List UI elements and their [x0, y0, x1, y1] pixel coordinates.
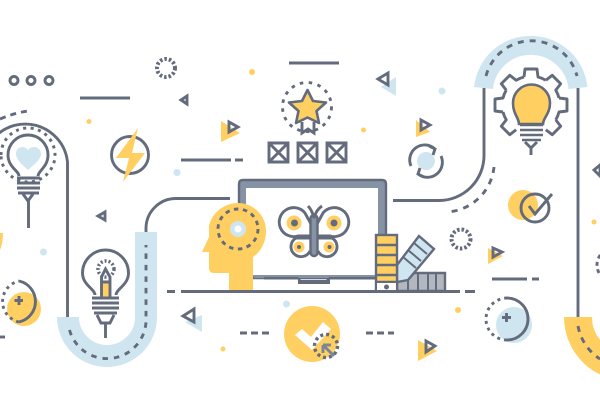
yellow dot: [455, 307, 461, 313]
triangle: [98, 212, 105, 220]
triangle pair yellow: [418, 340, 437, 361]
blue dot: [283, 300, 290, 308]
check with cursor icon: [284, 306, 340, 362]
bulb with heart icon: [1, 128, 55, 228]
head with dashed brain: [202, 203, 266, 290]
edge triangle: [594, 165, 600, 176]
yellow dot: [220, 346, 226, 352]
three crossed boxes: [269, 143, 346, 162]
short line: [80, 97, 130, 99]
left path arch: [0, 111, 68, 317]
edge dashed ring: [597, 248, 600, 282]
dashed line: [492, 278, 539, 280]
butterfly icon: [279, 206, 349, 257]
bulb with pencil icon: [82, 250, 128, 338]
blue dot: [174, 169, 180, 176]
top right blue arch: [484, 41, 578, 88]
dashed line: [366, 332, 394, 334]
yellow edge shape: [0, 233, 3, 250]
dashed line: [181, 159, 243, 161]
triangle pair blue: [183, 309, 202, 332]
short line: [289, 62, 339, 64]
yellow dot: [86, 119, 92, 124]
blue dot: [438, 88, 446, 94]
right connector lines: [393, 88, 578, 317]
laptop: [239, 180, 386, 284]
dashed line: [240, 332, 269, 334]
yellow dot: [592, 220, 596, 224]
sun ring icon: [157, 59, 175, 77]
triangle pair yellow: [488, 248, 503, 264]
gear bulb icon: [495, 69, 567, 155]
swatches: [376, 235, 445, 291]
ground line: [167, 290, 475, 293]
bottom right yellow arc: [578, 317, 600, 367]
three small circles: [10, 76, 53, 84]
plus circle right: [486, 298, 532, 343]
triangle pair yellow: [221, 121, 240, 142]
check circle icon: [508, 190, 552, 222]
blue U track: [68, 232, 146, 359]
lightning bolt icon: [112, 128, 148, 182]
triangle: [181, 96, 187, 104]
plus circle left: [3, 281, 41, 326]
triangle pair yellow: [416, 120, 430, 137]
star badge icon: [282, 82, 332, 133]
yellow dot: [249, 69, 255, 75]
refresh icon: [410, 145, 442, 177]
short edge dash: [0, 336, 5, 338]
triangle pair blue: [378, 73, 396, 96]
yellow dot: [361, 128, 366, 132]
connector to laptop: [146, 198, 230, 232]
blue dot: [40, 248, 47, 256]
sun ring icon: [452, 230, 470, 248]
